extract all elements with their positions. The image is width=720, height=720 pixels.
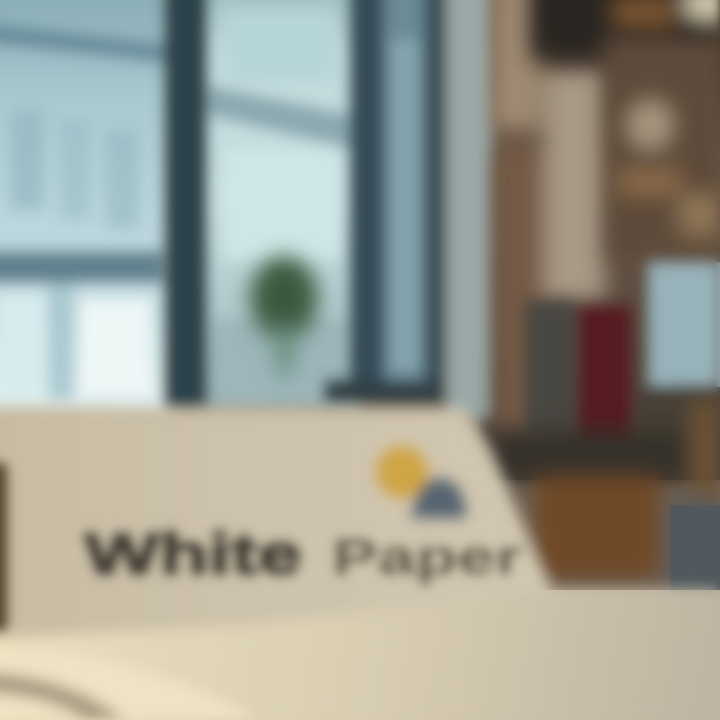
logo on paper (376, 446, 466, 518)
icon: yellow circle (376, 446, 428, 498)
background shelving (480, 0, 720, 480)
shelves with books (530, 0, 720, 260)
window: centre pane (200, 0, 360, 410)
blurred heading on paper: Paper (332, 529, 522, 585)
paper fold highlight (0, 649, 260, 720)
red object on the shelf (525, 300, 632, 450)
dark object at left edge (0, 462, 8, 632)
icon: blue dome (412, 478, 466, 518)
blurred heading on paper: White (84, 522, 302, 587)
brick and plaster wall (492, 0, 605, 440)
window: left pane (0, 0, 170, 420)
screen at right (640, 262, 720, 445)
paper: upper document (0, 406, 552, 650)
blurred heading on paper (84, 522, 522, 587)
paper: lower sheet (0, 590, 720, 720)
plant (250, 256, 318, 378)
counter and furniture, lower right (490, 400, 720, 585)
window mullions (166, 0, 446, 410)
pale column (446, 0, 492, 420)
